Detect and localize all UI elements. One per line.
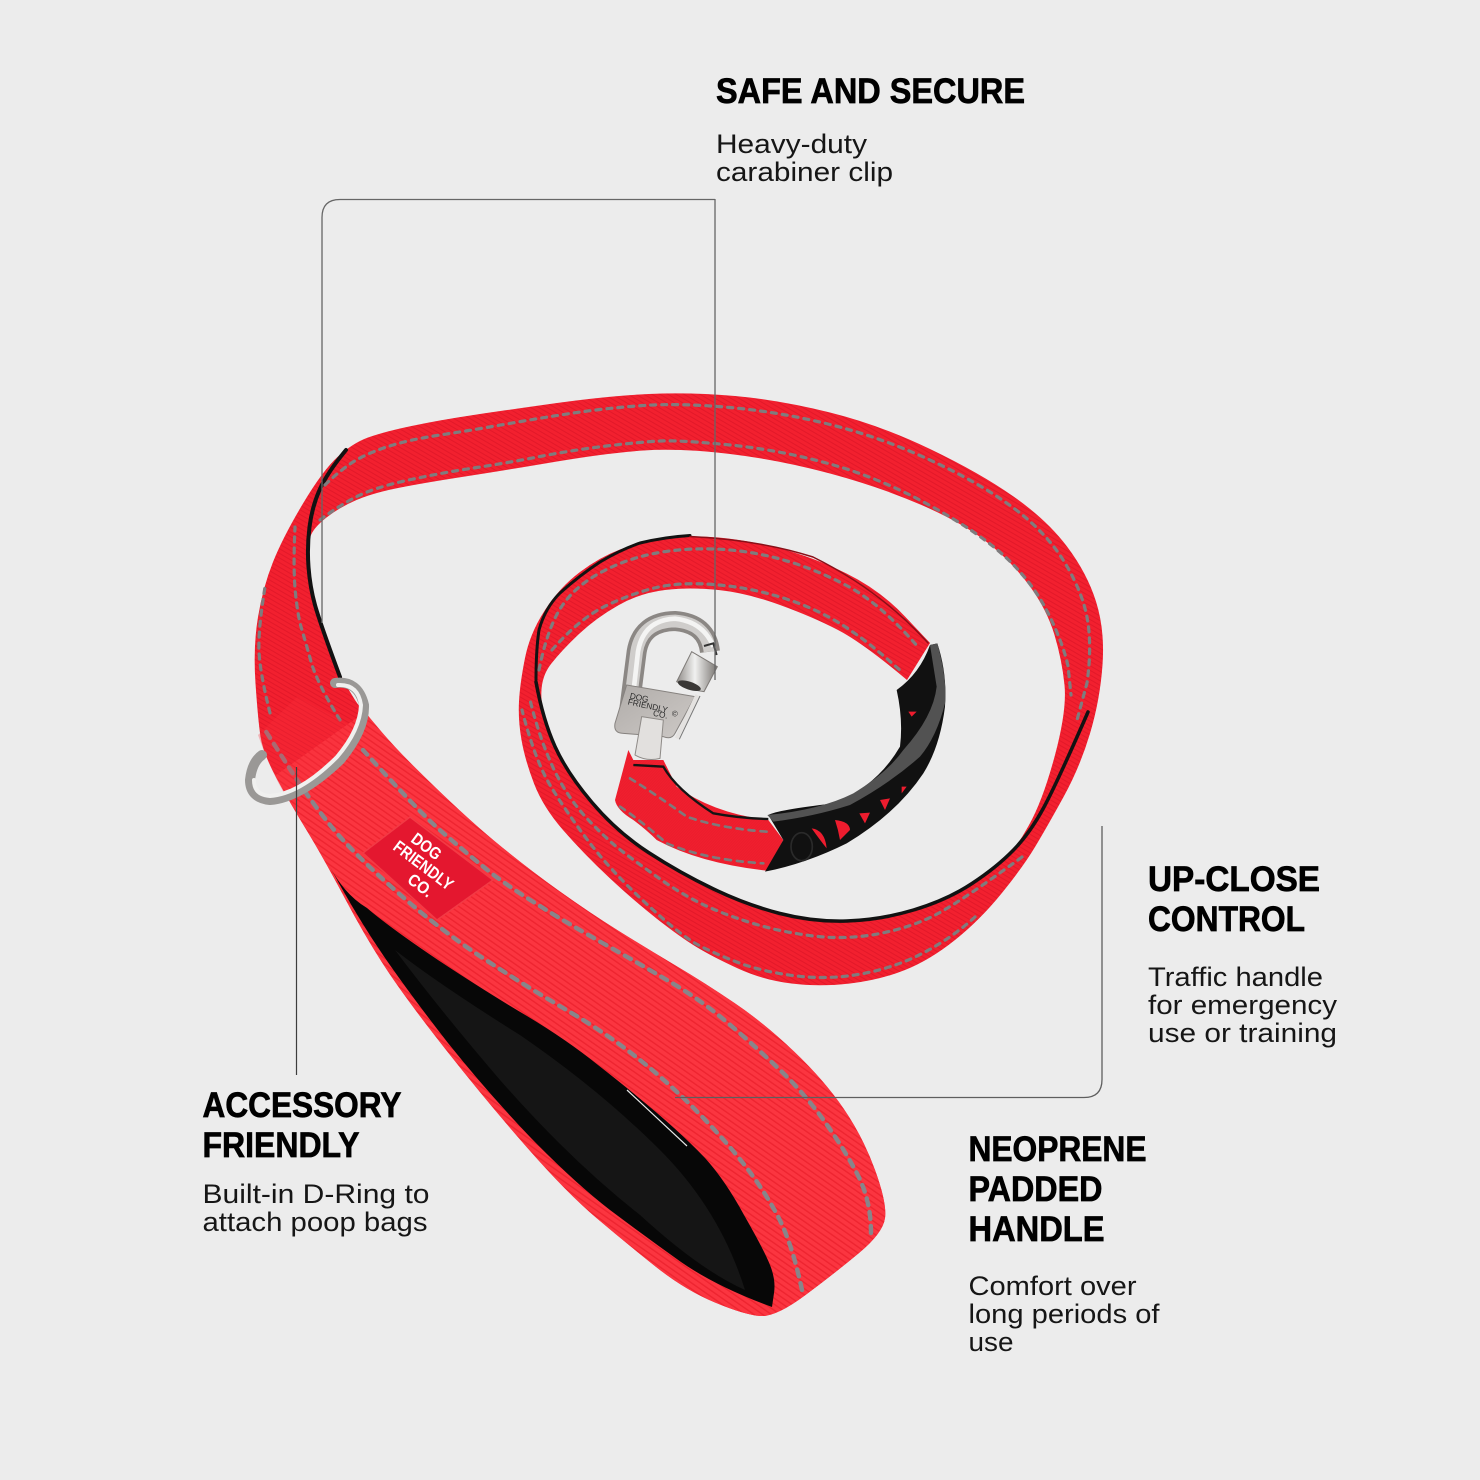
carabiner bow	[628, 619, 713, 717]
callout: accessory friendly: ACCESSORY	[202, 1086, 402, 1125]
carabiner screw lock	[677, 652, 717, 692]
callout: up-close control: for emergency	[1148, 990, 1338, 1020]
callout: up-close control	[1148, 860, 1338, 1048]
short strap end	[615, 750, 783, 871]
D-ring	[250, 683, 364, 800]
connector: neoprene handle to up-close control	[675, 826, 1102, 1098]
infographic canvas	[202, 78, 1337, 1352]
black lining edges	[308, 450, 1088, 921]
callout: up-close control: Traffic handle	[1148, 962, 1323, 992]
callout: neoprene padded handle: HANDLE	[968, 1210, 1104, 1249]
callout: safe and secure: SAFE AND SECURE	[716, 72, 1025, 111]
short strap lining	[633, 765, 768, 819]
callout: safe and secure: Heavy-duty	[716, 129, 868, 159]
rubber traffic handle	[765, 643, 945, 872]
callout: accessory friendly: Built-in D-Ring to	[202, 1179, 430, 1209]
rubber grip cut-outs	[812, 712, 917, 848]
brighter handle webbing	[275, 716, 886, 1316]
reflective stitching on handle	[265, 730, 871, 1290]
short strap stitching	[620, 778, 767, 863]
callout: neoprene padded handle	[968, 1130, 1160, 1357]
rubber grey top face	[767, 643, 945, 822]
carabiner engraving: FRIENDLY	[627, 697, 669, 715]
callout: safe and secure: carabiner clip	[716, 157, 893, 187]
carabiner engraving: CO.	[652, 708, 669, 721]
carabiner clip	[615, 619, 717, 759]
connector: safe and secure to carabiner	[322, 199, 715, 680]
carabiner engraving: DOG	[629, 691, 650, 704]
callout: neoprene padded handle: long periods of	[968, 1299, 1160, 1329]
neoprene highlight	[627, 1090, 687, 1146]
callout: accessory friendly: attach poop bags	[202, 1207, 428, 1237]
reflective stitching on long strap	[259, 405, 1090, 978]
carabiner engraving	[627, 691, 679, 721]
brand label	[363, 817, 493, 920]
callout: neoprene padded handle: Comfort over	[968, 1271, 1137, 1301]
callout: safe and secure	[716, 72, 1025, 187]
D-ring webbing fold	[258, 697, 360, 800]
callout: neoprene padded handle: use	[968, 1327, 1014, 1357]
red strap silhouette	[255, 393, 1103, 1316]
carabiner engraving: ©	[671, 709, 679, 719]
carabiner plate	[615, 685, 695, 738]
callout: neoprene padded handle: PADDED	[968, 1170, 1102, 1209]
callout: accessory friendly	[202, 1086, 430, 1237]
connector: accessory friendly to D-ring	[296, 767, 298, 1075]
brand label: CO.	[404, 870, 437, 901]
neoprene inner padding	[395, 950, 745, 1290]
callout: accessory friendly: FRIENDLY	[202, 1126, 360, 1165]
carabiner latch tip	[704, 643, 717, 655]
callout: up-close control: UP-CLOSE	[1148, 860, 1320, 899]
screw lock opening	[677, 678, 702, 693]
carabiner swivel	[635, 717, 663, 759]
brand label: DOG	[407, 829, 445, 864]
carabiner gate	[677, 695, 697, 738]
rubber swirl logo	[791, 833, 812, 861]
leash illustration	[250, 393, 1103, 1340]
neoprene padded handle lining	[330, 867, 774, 1307]
callout: neoprene padded handle: NEOPRENE	[968, 1130, 1146, 1169]
callout: up-close control: use or training	[1148, 1018, 1337, 1048]
callout: up-close control: CONTROL	[1148, 900, 1305, 939]
brand label: FRIENDLY	[390, 837, 457, 895]
traffic handle and carabiner	[615, 619, 945, 872]
